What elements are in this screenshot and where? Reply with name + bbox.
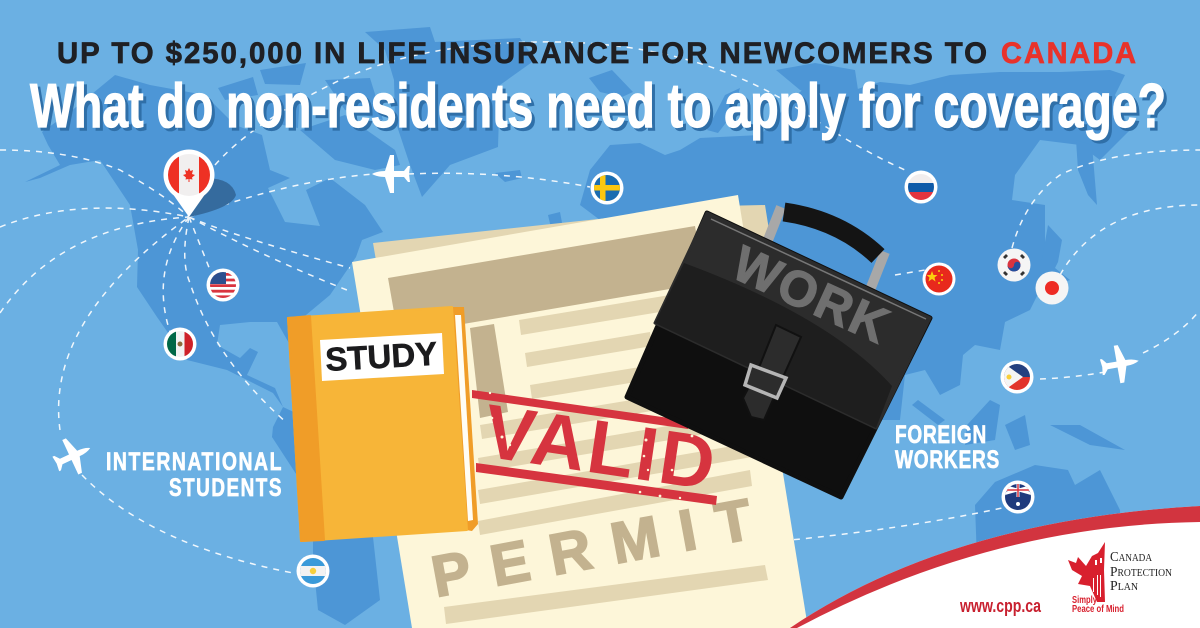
logo name: Canada: [1110, 550, 1153, 565]
Kamchatka: [1076, 140, 1097, 205]
page text lines: [444, 295, 768, 624]
word: PERMIT: PERMIT: [427, 485, 767, 610]
flag: Philippines: [1000, 360, 1034, 394]
label: international students: INTERNATIONAL: [106, 448, 283, 476]
Greenland: [365, 27, 535, 197]
logo name: Protection: [1110, 565, 1172, 580]
briefcase: work: [627, 207, 930, 497]
heading: subtitle: UP TO $250,000 IN LIFE INSURANCE FOR NEWCOMERS TO: [57, 37, 989, 70]
Arctic Eurasia islands: [589, 63, 858, 133]
flag: Japan: [1036, 272, 1068, 304]
page photo box: [470, 324, 508, 418]
label: foreign workers: FOREIGN: [895, 421, 987, 449]
page header band: [388, 226, 705, 335]
flag: Argentina: [296, 554, 330, 588]
footer: red swoosh: [790, 506, 1200, 628]
Japan: [1036, 225, 1062, 297]
briefcase handle: [768, 207, 885, 290]
label: international students: [106, 448, 283, 502]
stamp speckles: [489, 392, 693, 499]
Eurasia: [580, 70, 1130, 420]
label: foreign workers: WORKERS: [895, 446, 1000, 474]
flag: Russia: [904, 170, 938, 204]
book label: [320, 333, 444, 381]
stamp: VALID: VALID: [479, 389, 720, 507]
heading: subtitle: CANADA: [1001, 37, 1138, 70]
logo name: [1110, 550, 1172, 594]
logo tagline: [1072, 595, 1124, 615]
flag: USA: [206, 268, 240, 302]
website link: www.cpp.ca: [959, 596, 1042, 616]
logo: Canada Protection Plan: [1068, 542, 1172, 615]
word: STUDY: STUDY: [324, 335, 438, 378]
logo name: Plan: [1110, 579, 1138, 594]
Australia: [975, 465, 1122, 560]
briefcase strap: [743, 325, 801, 420]
briefcase body: [627, 213, 930, 497]
icon: plane top: [372, 155, 410, 193]
flap shadow area: [655, 263, 892, 428]
flag: Mexico: [164, 328, 196, 360]
South America: [272, 410, 380, 625]
flag: Sweden: [590, 172, 624, 204]
flag: Australia: [1002, 480, 1034, 514]
label: foreign workers: [895, 421, 1000, 474]
footer: white corner panel: [790, 506, 1200, 628]
pin: Canada: [164, 150, 236, 217]
document: back page: [373, 205, 785, 400]
Arctic islands: [218, 63, 400, 170]
flag: China: [922, 262, 956, 296]
Southeast Asia islands: [912, 400, 1125, 450]
book: study: [288, 307, 478, 541]
icon: plane left: [48, 431, 98, 481]
Iceland and UK: [495, 170, 563, 232]
flag: South Korea: [998, 248, 1030, 282]
North and Central America: [25, 75, 383, 480]
word: WORK: WORK: [724, 235, 910, 360]
briefcase flap: [655, 213, 930, 428]
logo tagline: Peace of Mind: [1072, 604, 1124, 615]
logo maple leaf: [1068, 542, 1105, 602]
document: permit page: [352, 195, 808, 628]
label: international students: STUDENTS: [169, 474, 283, 502]
briefcase buckle: [745, 365, 786, 398]
icon: plane right: [1098, 342, 1142, 386]
logo tagline: Simply: [1072, 595, 1097, 606]
